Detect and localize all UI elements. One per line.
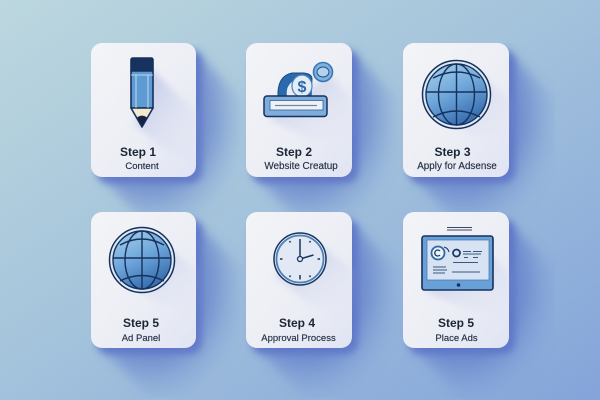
heading: step 3: Step 3 <box>434 145 471 159</box>
illustration <box>91 43 555 398</box>
icon: tablet with ad <box>422 236 493 290</box>
text: website creatup: Website Creatup <box>264 161 338 172</box>
icon: small coin <box>314 62 332 82</box>
text: content: Content <box>125 161 159 172</box>
heading: step 1: Step 1 <box>120 145 156 159</box>
text: apply for adsense: Apply for Adsense <box>417 161 497 172</box>
icon: coin stack with dollar: $ <box>298 79 307 96</box>
panel: step 5 place ads <box>403 212 555 398</box>
icon: pencil <box>131 58 153 127</box>
heading: step 5: Step 5 <box>123 316 159 330</box>
heading: step 2: Step 2 <box>276 145 312 159</box>
icon: top lines <box>447 228 472 230</box>
heading: step 5: Step 5 <box>438 316 474 330</box>
heading: step 4: Step 4 <box>279 316 315 330</box>
text: place ads: Place Ads <box>435 333 478 344</box>
icon: clock <box>274 233 326 285</box>
panel: step 1 content <box>91 43 242 228</box>
panel: step 4 approval process <box>246 212 398 398</box>
text: ad panel: Ad Panel <box>122 333 160 344</box>
panel: step 5 ad panel <box>91 212 242 398</box>
icon: globe <box>110 228 174 292</box>
panel: step 3 apply for adsense <box>403 43 555 228</box>
icon: browser bar <box>264 96 327 116</box>
icon: coin stack with dollar <box>278 73 312 97</box>
text: approval process: Approval Process <box>261 333 336 344</box>
panel: step 2 website creatup <box>246 43 398 228</box>
icon: globe <box>422 60 490 128</box>
